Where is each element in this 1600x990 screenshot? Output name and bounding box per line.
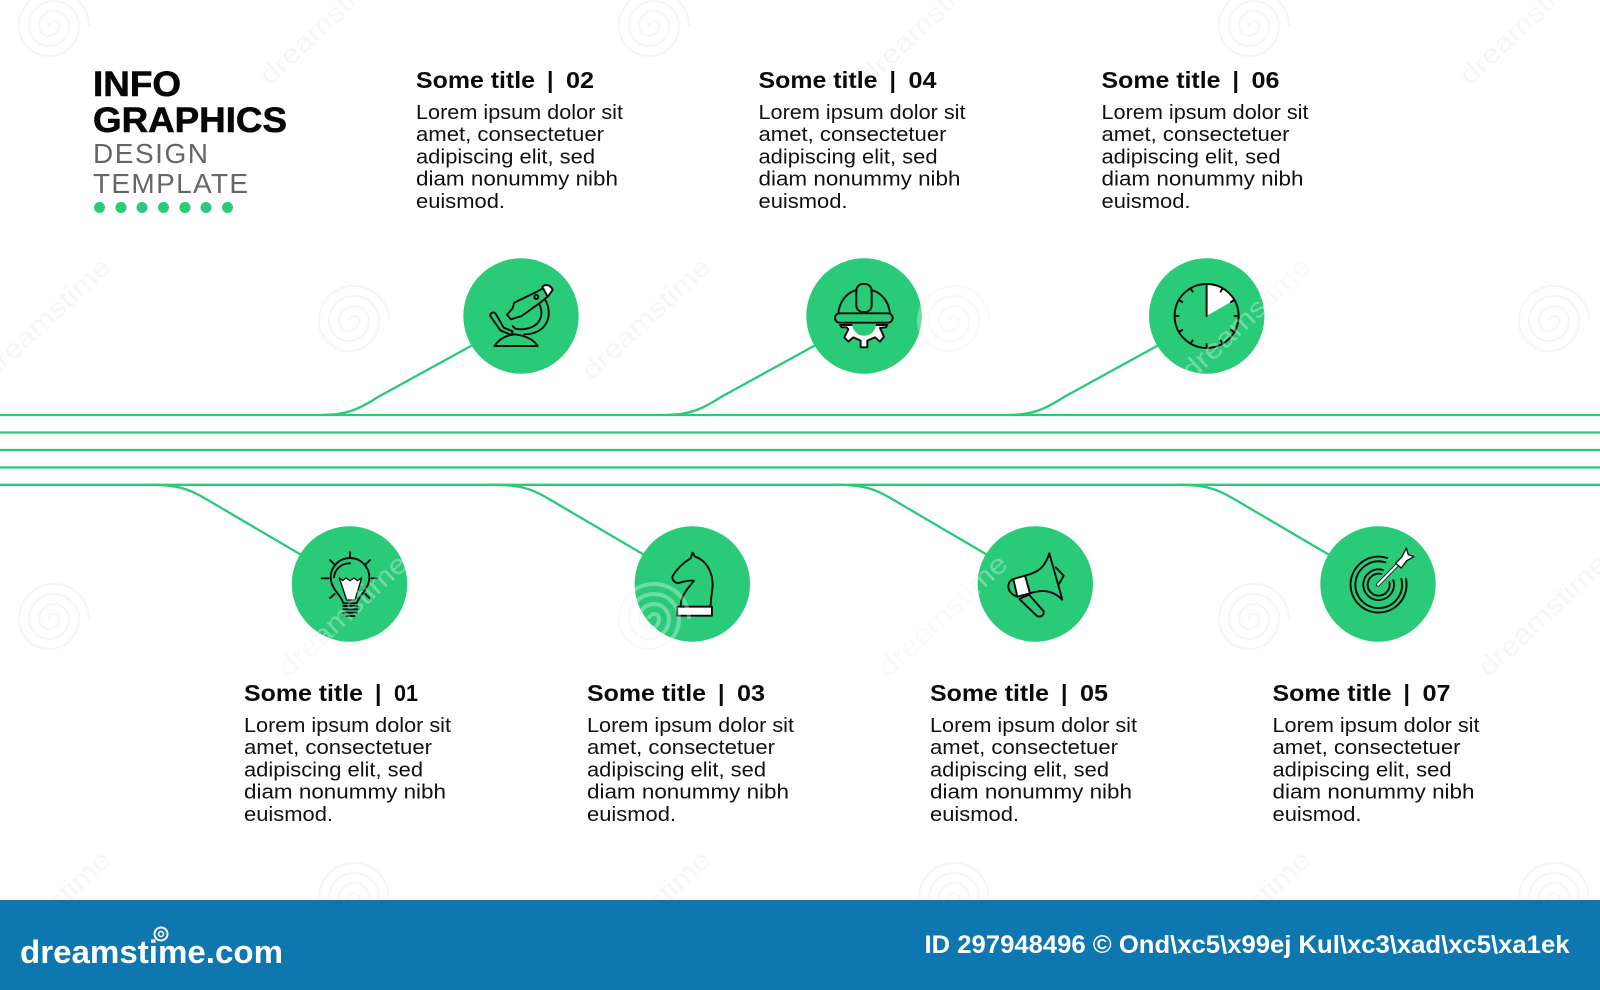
heading: step 02: | [547,67,553,93]
body text: step 04: adipiscing elit, sed [758,146,938,168]
watermark overlay on circles: dreamstime [1175,251,1316,386]
logo: dreamstime.com: dreamstime.com [20,934,283,970]
body text: step 03: diam nonummy nibh [587,780,789,804]
icon: helmet with gear [835,284,893,347]
heading: step 05: Some title [930,680,1049,706]
panel: step 06 text [1102,67,1309,213]
body text: step 01: amet, consectetuer [244,736,432,759]
heading: step 05: | [1061,680,1067,706]
heading: step 07: Some title [1272,680,1392,706]
icon: clock [1175,284,1239,348]
connector: step 06 [1008,341,1166,415]
body text: step 04 [758,101,966,213]
heading: step 03: | [718,680,724,706]
body text: step 02 [416,101,623,213]
heading: step 04: Some title [758,67,878,93]
watermark layer: dreamstime [272,548,413,683]
heading: step 04: 04 [908,67,937,93]
body text: step 02: adipiscing elit, sed [416,146,595,168]
heading: step 02: 02 [566,67,594,93]
watermark layer: dreamstime [575,251,716,386]
body text: step 04: amet, consectetuer [758,123,947,146]
heading: step 03: 03 [737,680,765,706]
body text: step 03: amet, consectetuer [587,736,775,759]
heading: step 06 [1102,67,1280,93]
heading: step 05: 05 [1080,680,1108,706]
body text: step 02: amet, consectetuer [416,123,604,146]
heading: step 07: 07 [1422,680,1450,706]
body text: step 06 [1102,101,1309,213]
icon: microscope [490,285,553,346]
footer banner [0,900,1600,990]
body text: step 01 [244,714,451,826]
heading: step 01 [244,680,418,706]
circle: step 02 microscope [463,258,579,374]
watermark overlay on circles [272,251,1316,683]
body text: step 07: adipiscing elit, sed [1272,758,1452,782]
body text: step 03: Lorem ipsum dolor sit [587,714,794,737]
circle: step 06 clock [1149,258,1264,374]
body text: step 07: amet, consectetuer [1272,736,1461,759]
circle: step 03 chess knight [635,526,750,642]
connector: step 05 [836,485,996,560]
title: INFO [93,65,181,104]
heading: step 02 [416,67,594,93]
panel: step 02 text [416,67,623,213]
panel: step 05 text [930,680,1137,826]
connector: step 01 [150,485,310,560]
heading: step 05 [930,680,1108,706]
heading: step 06: | [1232,67,1239,93]
heading: step 04 [758,67,937,93]
heading: step 01: 01 [394,680,418,706]
body text: step 05: diam nonummy nibh [930,780,1132,804]
body text: step 07 [1272,714,1480,826]
body text: step 01: diam nonummy nibh [244,780,446,804]
body text: step 04: Lorem ipsum dolor sit [758,101,966,124]
body text: step 05: euismod. [930,803,1019,826]
body text: step 01: adipiscing elit, sed [244,758,423,782]
body text: step 02: euismod. [416,190,505,213]
title dots [94,202,233,213]
body text: step 03: euismod. [587,803,676,826]
watermark overlay on circles: dreamstime [872,548,1013,683]
heading: step 03 [587,680,765,706]
body text: step 01: Lorem ipsum dolor sit [244,714,451,737]
body text: step 06: adipiscing elit, sed [1102,146,1280,168]
image id and credit: ID 297948496 © Ond\xc5\x99ej Kul\xc3\xad\xc5\xa1ek [924,931,1570,959]
icon: light bulb [322,552,377,616]
body text: step 05 [930,714,1137,826]
body text: step 06: Lorem ipsum dolor sit [1102,101,1309,124]
panel: step 03 text [587,680,794,826]
heading: step 06: 06 [1252,67,1280,93]
connector: step 04 [665,341,823,415]
title: TEMPLATE [93,168,248,199]
circle: step 05 megaphone [978,526,1093,642]
body text: step 04: euismod. [758,190,848,213]
body text: step 05: amet, consectetuer [930,736,1118,759]
title: GRAPHICS [93,101,287,140]
body text: step 06: diam nonummy nibh [1102,168,1304,190]
body text: step 06: amet, consectetuer [1102,123,1290,146]
body text: step 05: adipiscing elit, sed [930,758,1109,782]
watermark layer: dreamstime [575,844,716,979]
body text: step 05: Lorem ipsum dolor sit [930,714,1137,737]
connector: step 02 [322,341,480,415]
body text: step 02: diam nonummy nibh [416,168,618,190]
body text: step 07: euismod. [1272,803,1362,826]
heading: step 06: Some title [1102,67,1221,93]
heading: step 02: Some title [416,67,535,93]
body text: step 07: Lorem ipsum dolor sit [1272,714,1480,737]
watermark layer: dreamstime [1175,844,1316,979]
body text: step 03: adipiscing elit, sed [587,758,766,782]
panel: step 04 text [758,67,966,213]
panel: step 01 text [244,680,451,826]
circle: step 07 target [1320,526,1436,642]
heading: step 07: | [1404,680,1410,706]
heading: step 03: Some title [587,680,706,706]
heading: step 04: | [890,67,896,93]
body text: step 03 [587,714,794,826]
icon: chess knight [672,553,713,616]
connector: step 07 [1178,485,1338,560]
body text: step 01: euismod. [244,803,333,826]
heading: step 01: | [375,680,381,706]
watermark layer: dreamstime [1472,548,1600,683]
watermark overlay on circles: dreamstime [272,548,413,683]
connector: step 03 [493,485,653,560]
title [93,65,287,199]
icon: target with arrow [1351,548,1414,613]
body text: step 04: diam nonummy nibh [758,168,960,190]
panel: step 07 text [1272,680,1480,826]
circle: step 04 helmet [806,258,922,374]
icon: megaphone [1008,553,1064,617]
body text: step 06: euismod. [1102,190,1190,213]
watermark layer: dreamstime [872,548,1013,683]
body text: step 02: Lorem ipsum dolor sit [416,101,623,124]
circle: step 01 bulb [292,526,407,642]
title: DESIGN [93,138,208,169]
watermark layer: dreamstime [1175,251,1316,386]
heading: step 01: Some title [244,680,363,706]
heading: step 07 [1272,680,1450,706]
body text: step 07: diam nonummy nibh [1272,780,1474,804]
timeline lines [0,415,1600,485]
